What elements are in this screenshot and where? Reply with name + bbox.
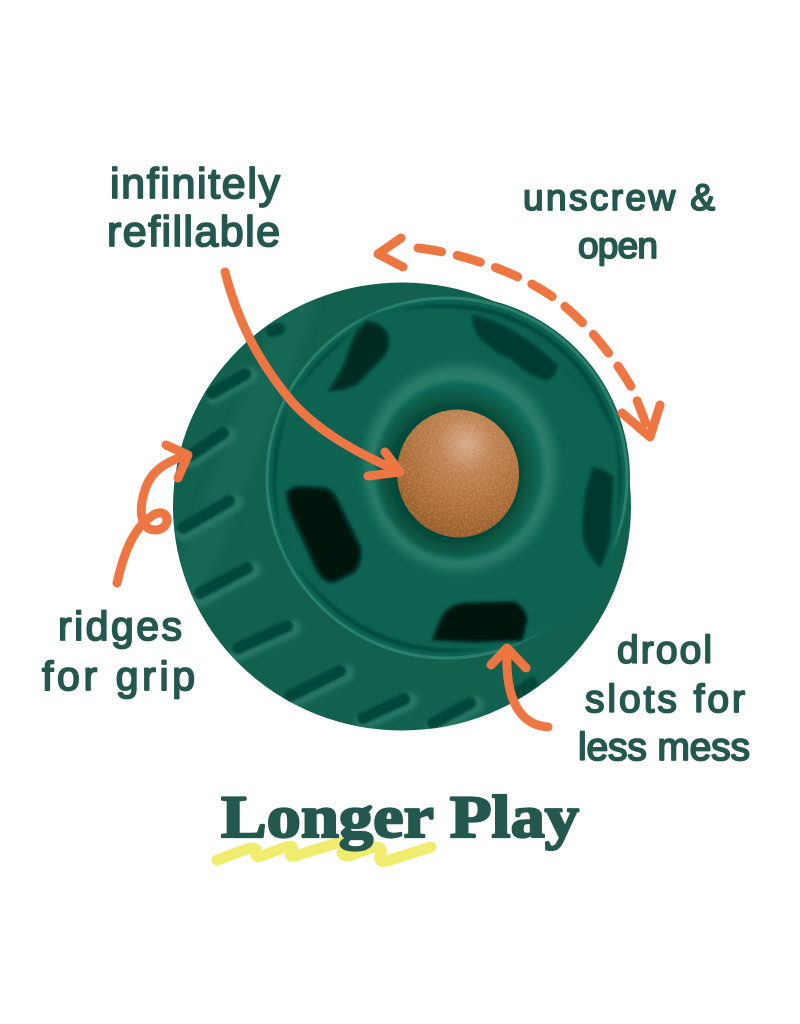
inner plate [275,306,619,650]
arrow: refillable [225,272,400,476]
hole: left [287,487,360,582]
toy ball [173,282,631,730]
label: ridges for grip [42,603,195,699]
label: infinitely refillable: infinitely [110,160,280,208]
label: infinitely refillable: refillable [107,208,280,256]
label: ridges for grip: for grip [42,653,195,699]
arrow: drool slots [491,648,548,727]
label: ridges for grip: ridges [58,603,182,649]
hole: top left [330,322,388,390]
infographic canvas [42,166,750,867]
ball body [173,282,631,730]
treat ball [389,402,527,545]
label: drool slots for less mess: drool [617,629,712,672]
raised lip around well [364,365,556,571]
grip ridges [175,300,532,727]
title underline squiggle [217,842,431,861]
label: unscrew and open [523,177,715,266]
treat ball texture [389,402,527,545]
title: Longer Play [221,784,579,850]
hole: top right [473,315,557,380]
top plate highlights [276,308,618,650]
label: drool slots for less mess [578,629,750,769]
arrow: ridges [117,445,188,583]
label: infinitely refillable [107,160,280,256]
rotating cap rim [267,298,627,658]
arrow: unscrew and open (dashed) [378,238,660,437]
label: drool slots for less mess: less mess [578,726,750,769]
label: unscrew and open: open [578,225,658,266]
hole: right [583,467,613,567]
central well [375,381,543,559]
label: unscrew and open: unscrew & [523,177,715,218]
hole: bottom [433,602,527,642]
label: drool slots for less mess: slots for [585,678,745,721]
